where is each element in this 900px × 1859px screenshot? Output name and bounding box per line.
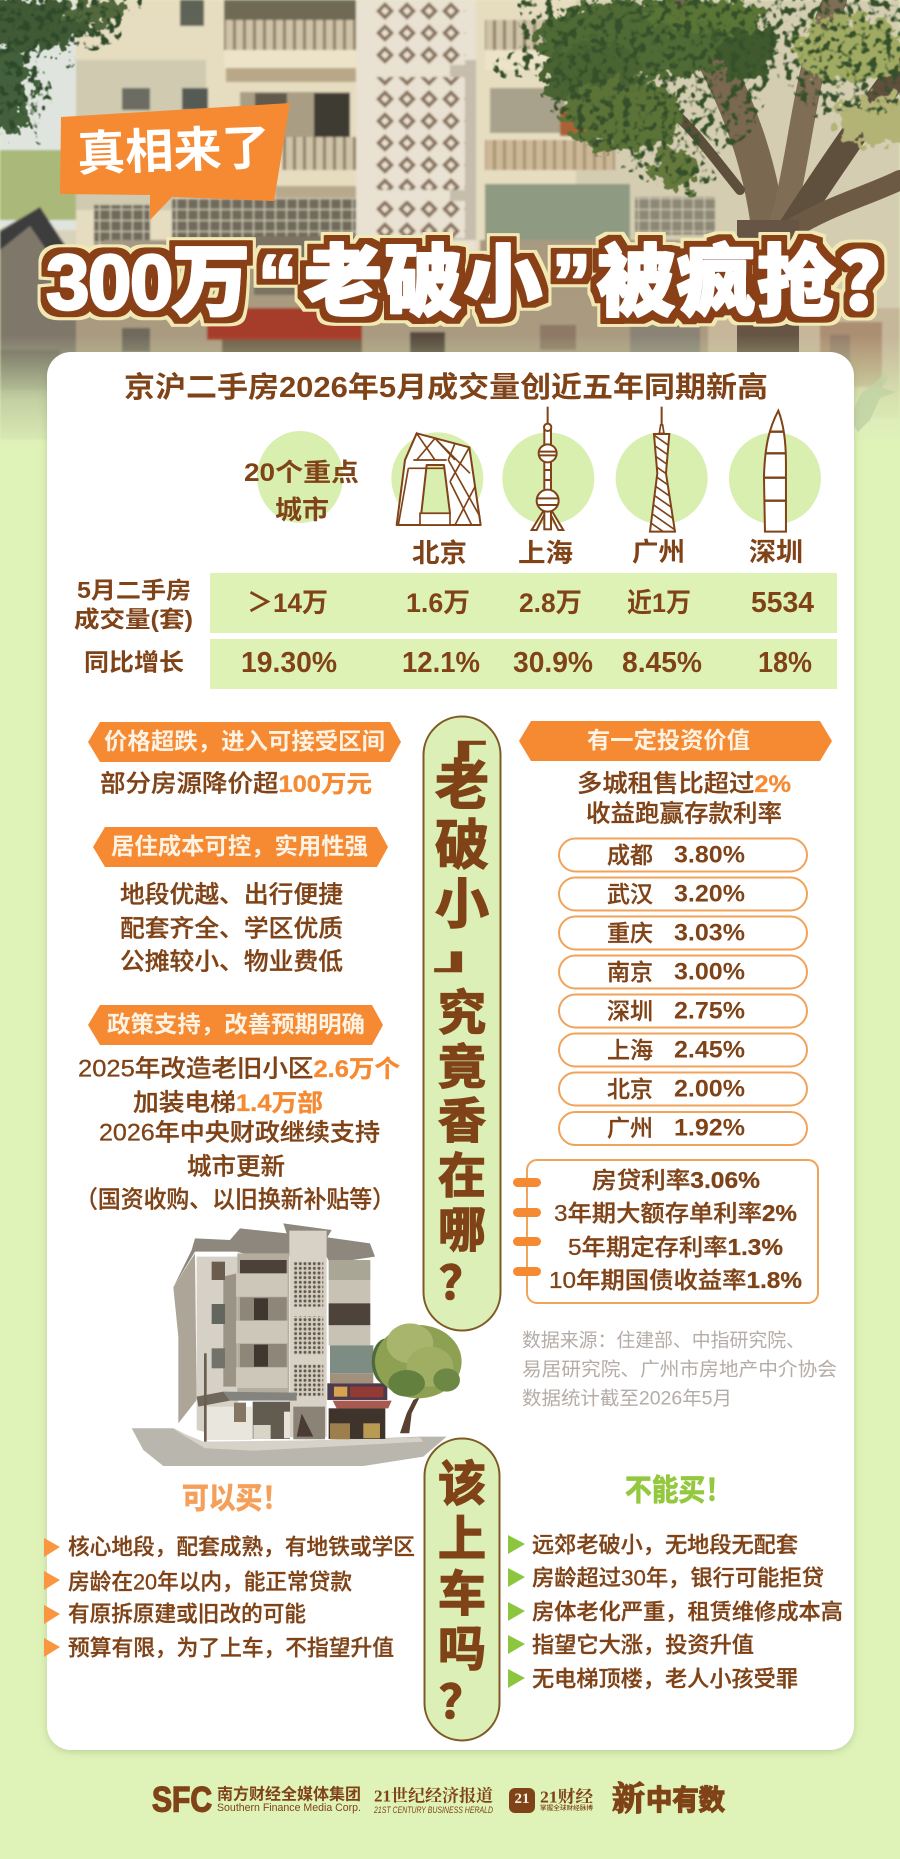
rent-to-price ratio list by city: 重庆 [607,920,653,946]
rent-to-price ratio list by city: 3.03% [674,920,745,946]
section: policy support: 2026年中央财政继续支持 [99,1120,380,1146]
rent-to-price ratio list by city: 深圳 [607,998,653,1024]
footer logos: 南方财经全媒体集团 [217,1784,361,1804]
rent-to-price ratio list by city: 成都 [607,842,653,868]
footer logos: 21财经 [540,1786,594,1806]
circle: 20 key cities: 城市 [275,495,329,525]
vertical pill: 「老破小」究竟香在哪？: 小 [435,875,489,935]
data row: year-on-year growth: 12.1% [402,647,480,679]
footer logos: 21 [514,1791,530,1807]
rent-to-price ratio list by city: 3.20% [674,880,745,908]
data row: year-on-year growth: 30.9% [513,647,593,679]
footer logos: 掌握全球财经脉搏 [540,1804,593,1812]
section: price drop [88,722,401,798]
vertical pill: 「老破小」究竟香在哪？: 」 [433,940,511,976]
vertical pill: 「老破小」究竟香在哪？: 在 [438,1150,486,1204]
rent-to-price ratio list by city: 北京 [607,1076,653,1102]
tree foliage [0,0,900,192]
tree trunks [660,0,900,245]
rent-to-price ratio list by city: 2.00% [674,1076,745,1102]
city labels: 广州 [632,537,685,567]
column: can buy: 有原拆原建或旧改的可能 [68,1602,306,1626]
section: policy support [75,1005,400,1214]
section: policy support: 2025年改造老旧小区 2.6万个 [78,1056,400,1082]
fade into background [0,335,900,455]
rent-to-price ratio list by city [559,838,807,1145]
vertical pill: 「老破小」究竟香在哪？: 哪 [438,1204,486,1258]
vertical pill: 该上车吗？: 该 [438,1458,486,1512]
icon: Beijing CCTV tower [391,432,483,525]
section: living cost: 居住成本可控，实用性强 [111,833,368,859]
section: living cost: 地段优越、出行便捷 [120,882,343,908]
data row: May second-hand sales: 近1万 [627,588,691,618]
footer logos: 新 [612,1781,645,1818]
city labels: 上海 [518,538,573,568]
vertical pill: 「老破小」究竟香在哪？: 「 [409,739,487,775]
section: investment value heading: 多城租售比超过 2% [577,770,791,798]
comparison box: interest rates: 房贷利率 3.06% [592,1167,760,1193]
data row: year-on-year growth: 18% [758,647,812,679]
column: can buy [44,1482,415,1660]
data row: May second-hand sales: 1.6万 [406,588,470,618]
section: investment value heading: 收益跑赢存款利率 [586,800,782,828]
right balconies [485,20,578,50]
vertical pill: 「老破小」究竟香在哪？ [409,716,511,1330]
column: cannot buy: 不能买！ [625,1474,732,1508]
lower facade [76,295,716,360]
vertical pill: 该上车吗？: ？ [439,1676,485,1728]
column: cannot buy: 房龄超过30年，银行可能拒贷 [532,1566,824,1590]
vertical pill: 「老破小」究竟香在哪？: 老 [435,756,489,816]
section: investment value heading [519,721,832,828]
tag bubble: 真相来了 [60,103,290,220]
data row: May second-hand sales: 5月二手房 [77,577,191,603]
vertical pill: 「老破小」究竟香在哪？: 香 [438,1096,486,1148]
section: investment value heading: 有一定投资价值 [587,727,750,753]
vertical pill: 该上车吗？: 车 [438,1568,486,1622]
data source note: 数据来源：住建部、中指研究院、 [522,1330,805,1352]
footer logos: 21世纪经济报道 [374,1786,493,1806]
rent-to-price ratio list by city: 南京 [607,959,653,985]
section: policy support: （国资收购、以旧换新补贴等） [75,1186,395,1214]
left greenery and old house [0,150,76,220]
data row: year-on-year growth: 8.45% [622,647,702,679]
data row: May second-hand sales [74,573,837,633]
footer logos [152,1780,725,1820]
rent-to-price ratio list by city: 3.80% [674,842,745,868]
data row: year-on-year growth: 19.30% [241,647,337,679]
comparison box: interest rates: 10年期国债收益率 1.8% [549,1267,802,1293]
rent-to-price ratio list by city: 广州 [607,1115,653,1141]
rent-to-price ratio list by city: 2.75% [674,998,745,1024]
section: living cost [93,827,388,976]
hero illustration: old apartment building and banyan tree [0,0,900,455]
vertical pill: 「老破小」究竟香在哪？: 究 [438,988,486,1040]
footer logos: SFC [152,1780,212,1820]
section: policy support: 城市更新 [187,1154,285,1180]
rent-to-price ratio list by city: 3.00% [674,958,745,986]
tag bubble: 真相来了: 真相来了 [76,122,271,182]
data row: May second-hand sales: 成交量(套) [74,606,193,632]
column: can buy: 核心地段，配套成熟，有地铁或学区 [68,1534,415,1560]
lattice tower [356,0,476,330]
main white panel [47,352,854,1750]
column: can buy: 可以买！ [182,1482,289,1516]
city labels [412,537,803,568]
column: cannot buy [508,1474,843,1692]
section: price drop: 部分房源降价超 100万元 [100,770,372,798]
column: cannot buy: 远郊老破小，无地段无配套 [532,1532,798,1558]
section: policy support: 加装电梯 1.4万部 [133,1090,323,1116]
column: can buy: 房龄在20年以内，能正常贷款 [68,1570,352,1594]
column: cannot buy: 房体老化严重，租赁维修成本高 [532,1600,843,1624]
comparison box: interest rates: 3年期大额存单利率 2% [554,1200,797,1226]
data row: May second-hand sales: 5534 [751,587,814,619]
vertical pill: 该上车吗？ [424,1438,500,1740]
footer logos: 中有数 [646,1784,725,1816]
section: policy support: 政策支持，改善预期明确 [107,1011,365,1037]
left balconies and windows [224,0,356,20]
city labels: 深圳 [749,537,803,567]
comparison box: interest rates: 5年期定存利率 1.3% [568,1234,783,1260]
circle: 20 key cities [244,431,359,525]
data row: year-on-year growth [84,639,837,689]
footer logos: 21ST CENTURY BUSINESS HERALD [373,1805,493,1815]
section: living cost: 公摊较小、物业费低 [120,948,343,976]
vertical pill: 「老破小」究竟香在哪？: 破 [435,816,489,876]
data row: May second-hand sales: 2.8万 [519,588,582,618]
icon: Shanghai Oriental Pearl tower [502,407,594,530]
section: price drop: 价格超跌，进入可接受区间 [104,728,385,754]
footer logos: Southern Finance Media Corp. [217,1802,361,1814]
vertical pill: 「老破小」究竟香在哪？: 竟 [438,1042,486,1094]
vertical pill: 该上车吗？: 吗 [438,1624,486,1676]
illustration: old apartment block with tree [132,1223,462,1466]
rent-to-price ratio list by city: 1.92% [674,1114,745,1142]
rent-to-price ratio list by city: 2.45% [674,1036,745,1064]
rent-to-price ratio list by city: 武汉 [607,881,653,907]
column: can buy: 预算有限，为了上车，不指望升值 [68,1636,394,1660]
data row: year-on-year growth: 同比增长 [84,650,184,676]
main title: 300万“老破小”被疯抢？ [46,238,900,326]
circle: 20 key cities: 20个重点 [244,459,359,487]
column: cannot buy: 无电梯顶楼，老人小孩受罪 [532,1666,798,1692]
vertical pill: 该上车吗？: 上 [438,1514,486,1566]
city labels: 北京 [412,538,467,568]
icon: Shenzhen Ping An tower [729,411,821,532]
data source note: 易居研究院、广州市房地产中介协会 [522,1358,837,1380]
icon: Guangzhou Canton tower [616,407,708,543]
data row: May second-hand sales: ＞14万 [247,588,328,618]
vertical pill: 「老破小」究竟香在哪？: ？ [439,1257,485,1309]
data source note [522,1330,837,1410]
rent-to-price ratio list by city: 上海 [607,1037,653,1063]
panel heading: 京沪二手房2026年5月成交量创近五年同期新高 [124,371,768,404]
column: cannot buy: 指望它大涨，投资升值 [532,1632,754,1658]
data source note: 数据统计截至2026年5月 [522,1388,732,1410]
comparison box: interest rates [513,1160,818,1303]
section: living cost: 配套齐全、学区优质 [120,916,343,942]
